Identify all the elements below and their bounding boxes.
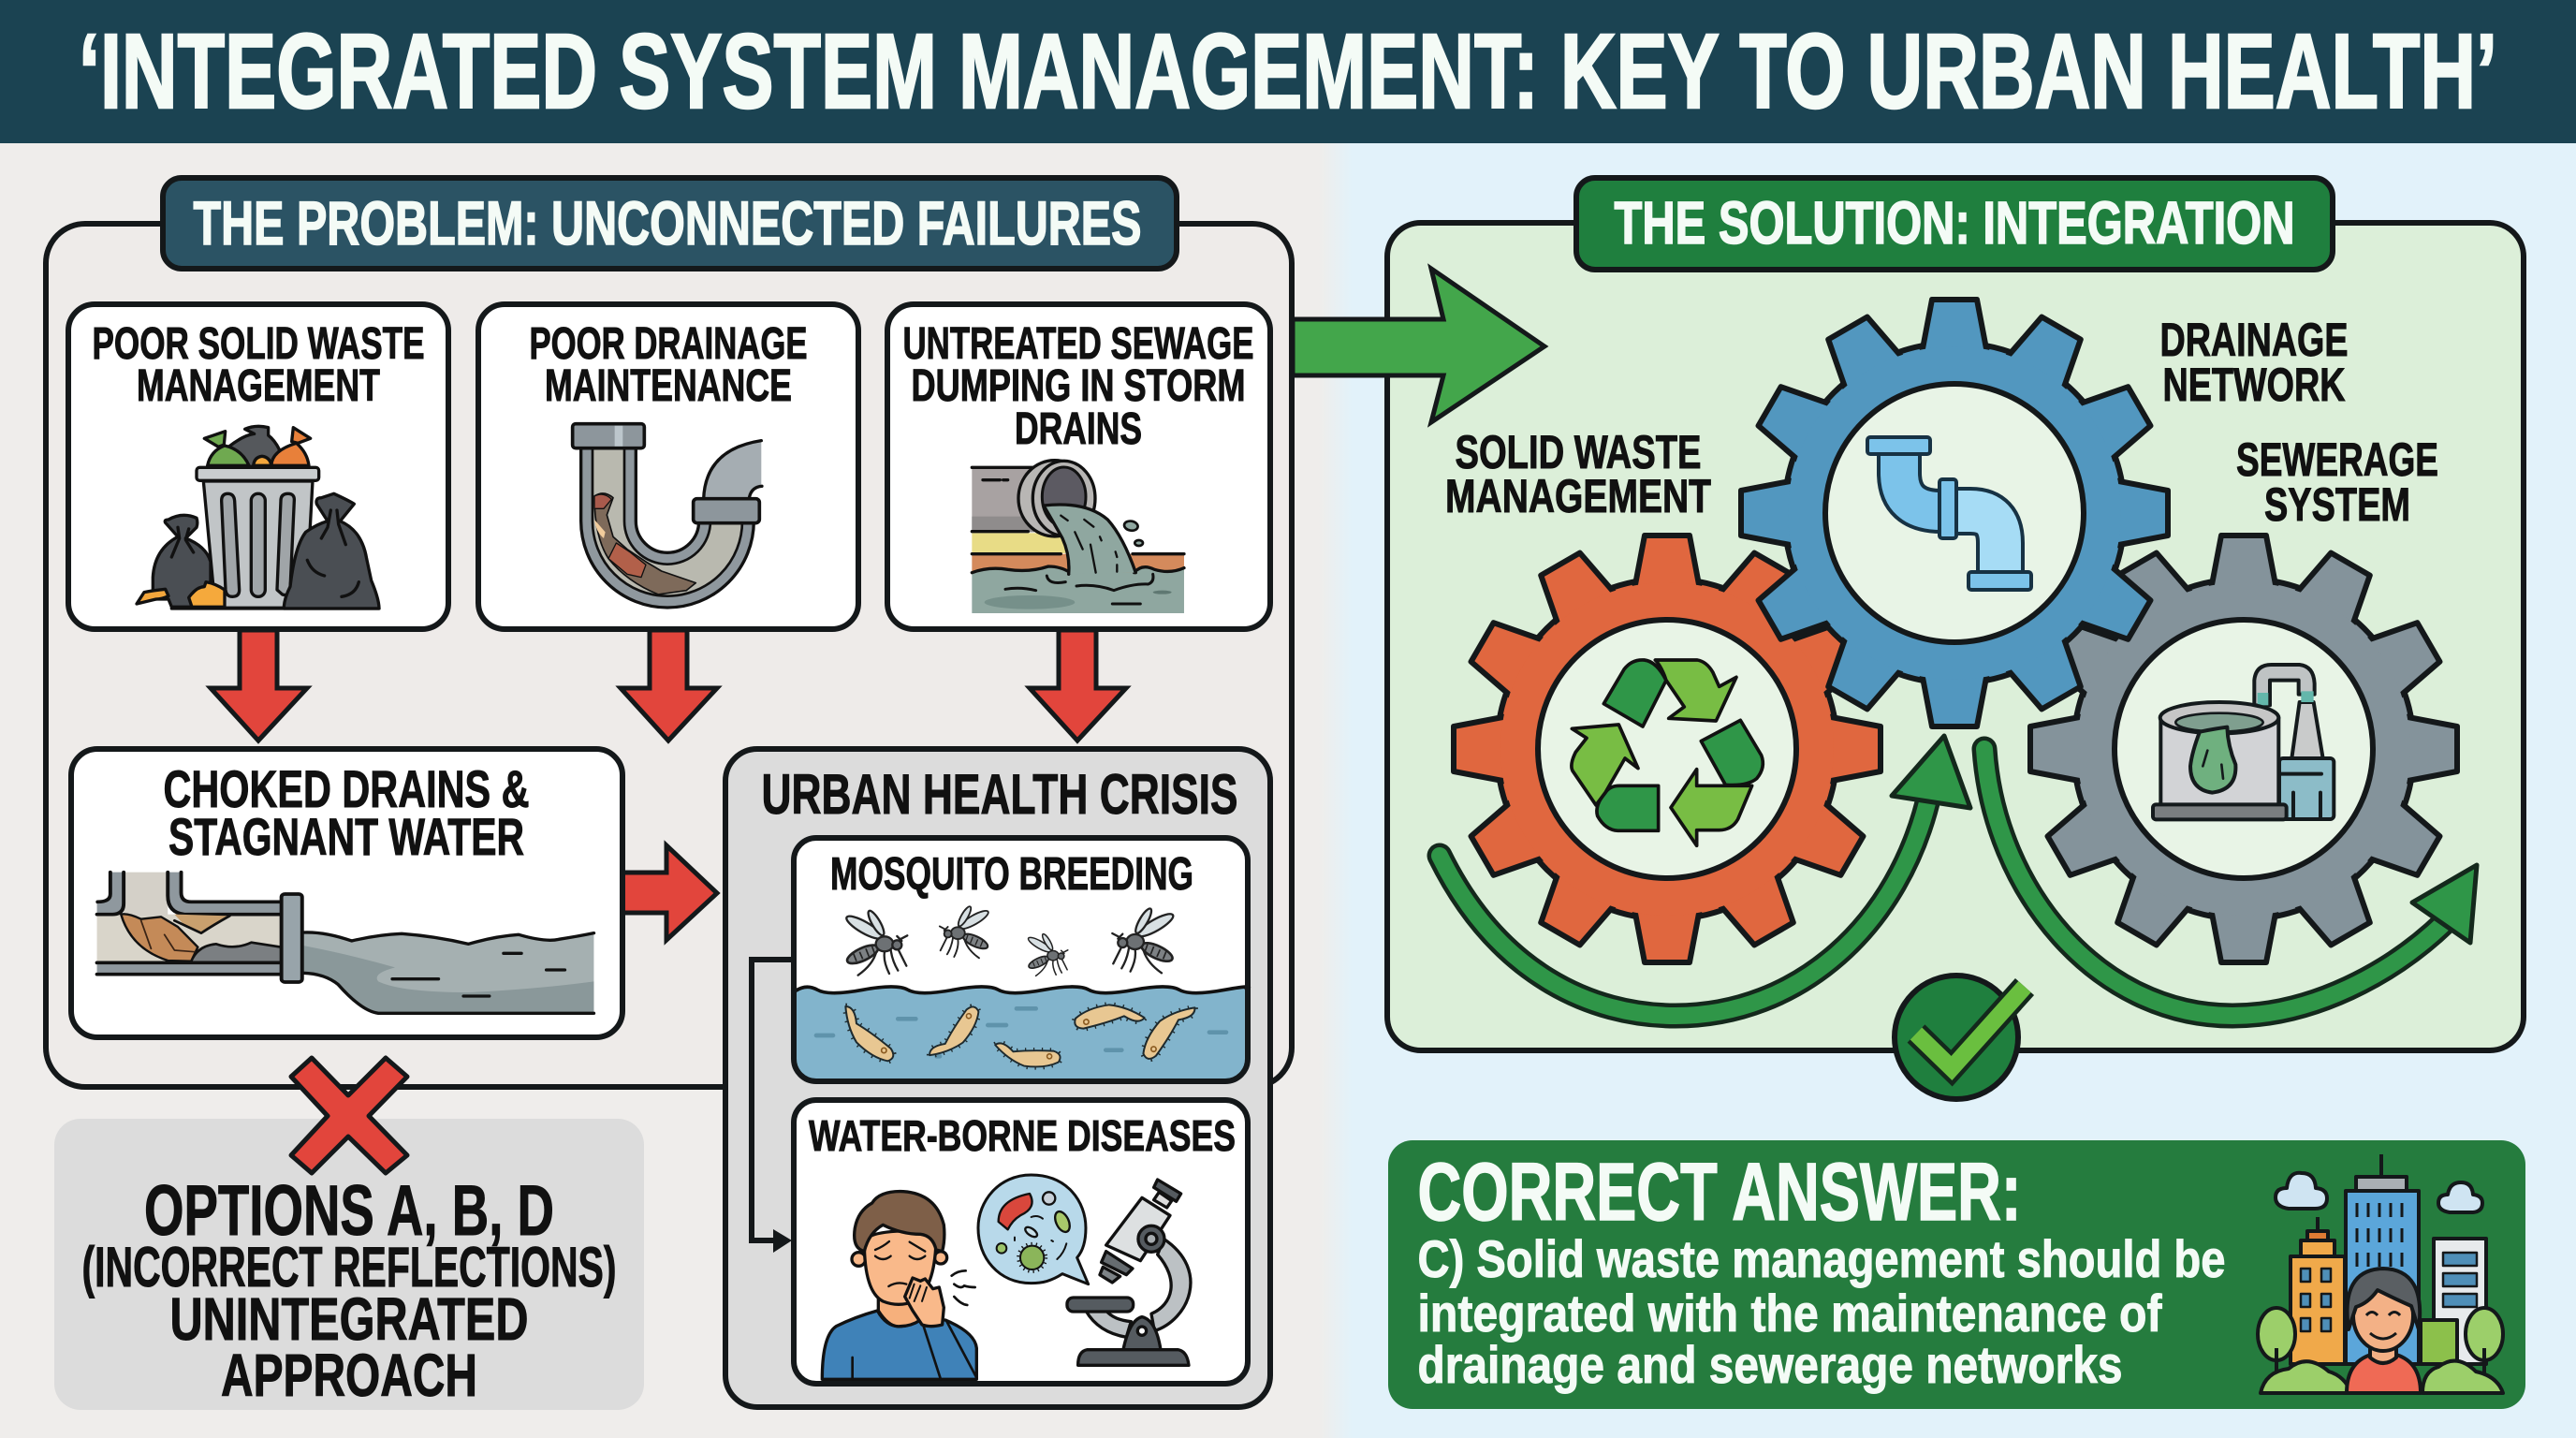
gear: solid waste management xyxy=(1454,536,1881,962)
card: poor drainage maintenance: MAINTENANCE xyxy=(545,361,792,411)
icon: sewage pipe outfall xyxy=(972,461,1184,613)
arrow: drainage to choked drains xyxy=(621,630,717,741)
card: choked drains and stagnant water: STAGNANT WATER xyxy=(168,807,524,866)
arrow: connector from mosquito breeding to diseases xyxy=(752,960,792,1253)
heading: the problem xyxy=(163,178,1177,269)
card: poor solid waste management: POOR SOLID WASTE xyxy=(92,319,425,369)
arrow: choked drains to health crisis xyxy=(622,845,717,940)
panel: correct answer: C) Solid waste management should be xyxy=(1417,1229,2226,1288)
panel: urban health crisis: URBAN HEALTH CRISIS xyxy=(762,763,1237,826)
icon: recycling arrows xyxy=(1572,660,1763,845)
card: untreated sewage dumping xyxy=(887,304,1270,629)
label: solid waste management: MANAGEMENT xyxy=(1445,470,1711,522)
card: water-borne diseases: WATER-BORNE DISEASES xyxy=(809,1111,1236,1160)
arrow: problem to solution block arrow xyxy=(1293,269,1544,422)
icon: choked pipe into stagnant water xyxy=(97,873,593,1013)
card: untreated sewage dumping: DUMPING IN STORM xyxy=(912,361,1245,411)
card: choked drains and stagnant water xyxy=(71,749,622,1037)
card: untreated sewage dumping: UNTREATED SEWAGE xyxy=(902,319,1254,369)
heading: the solution xyxy=(1576,178,2333,270)
label: drainage network: DRAINAGE xyxy=(2160,314,2348,366)
arrow: curved integration left xyxy=(1440,736,1970,1016)
card: water-borne diseases xyxy=(794,1100,1248,1384)
heading: the problem: THE PROBLEM: UNCONNECTED FAILURES xyxy=(193,188,1142,257)
mosquitoes xyxy=(844,905,1176,976)
icon: trash can with bags xyxy=(137,426,379,609)
panel: correct answer xyxy=(1388,1140,2525,1409)
card: poor drainage maintenance xyxy=(478,304,858,629)
card: mosquito breeding xyxy=(794,838,1249,1086)
card: poor drainage maintenance: POOR DRAINAGE xyxy=(530,319,807,369)
panel: incorrect options: UNINTEGRATED xyxy=(170,1285,528,1353)
icon: blue pipe xyxy=(1867,437,2031,590)
arrow: sewage to health crisis xyxy=(1030,630,1126,741)
panel: incorrect options xyxy=(54,1119,644,1410)
label: solid waste management xyxy=(1445,426,1711,522)
card: poor solid waste management: MANAGEMENT xyxy=(137,361,380,411)
panel: the solution xyxy=(1387,178,2524,1050)
panel: incorrect options: OPTIONS A, B, D xyxy=(144,1171,554,1251)
heading: the solution: THE SOLUTION: INTEGRATION xyxy=(1614,189,2295,257)
icon: microscope xyxy=(1067,1180,1191,1365)
arrow: waste to choked drains xyxy=(211,630,307,741)
card: choked drains and stagnant water: CHOKED DRAINS & xyxy=(163,759,530,818)
label: drainage network: NETWORK xyxy=(2162,359,2346,411)
icon: happy city xyxy=(2258,1154,2503,1393)
panel: incorrect options: (INCORRECT REFLECTIONS) xyxy=(82,1236,616,1299)
panel: urban health crisis xyxy=(725,749,1270,1407)
cross: incorrect options xyxy=(291,1058,407,1173)
water with larvae xyxy=(796,985,1249,1086)
icon: germs speech bubble xyxy=(978,1175,1089,1284)
icon: sick person xyxy=(822,1192,976,1379)
icon: clogged U pipe xyxy=(573,424,762,594)
label: sewerage system: SEWERAGE xyxy=(2236,433,2438,486)
panel: correct answer: CORRECT ANSWER: xyxy=(1417,1147,2022,1238)
label: drainage network xyxy=(2160,314,2348,411)
arrow: curved integration right xyxy=(1984,749,2477,1016)
card: untreated sewage dumping: DRAINS xyxy=(1015,404,1142,454)
icon: sewage treatment tank xyxy=(2153,665,2334,819)
panel: correct answer: integrated with the maintenance of xyxy=(1417,1284,2162,1343)
label: sewerage system: SYSTEM xyxy=(2264,478,2410,531)
label: solid waste management: SOLID WASTE xyxy=(1455,426,1702,478)
label: sewerage system xyxy=(2236,433,2438,531)
panel: incorrect options: APPROACH xyxy=(221,1342,477,1409)
panel: correct answer: drainage and sewerage networks xyxy=(1417,1335,2123,1394)
gear: drainage network xyxy=(1741,300,2168,726)
icon: check badge xyxy=(1895,976,2025,1099)
card: mosquito breeding: MOSQUITO BREEDING xyxy=(830,849,1193,900)
gear: sewerage system xyxy=(2030,536,2457,962)
card: poor solid waste management xyxy=(68,304,448,629)
